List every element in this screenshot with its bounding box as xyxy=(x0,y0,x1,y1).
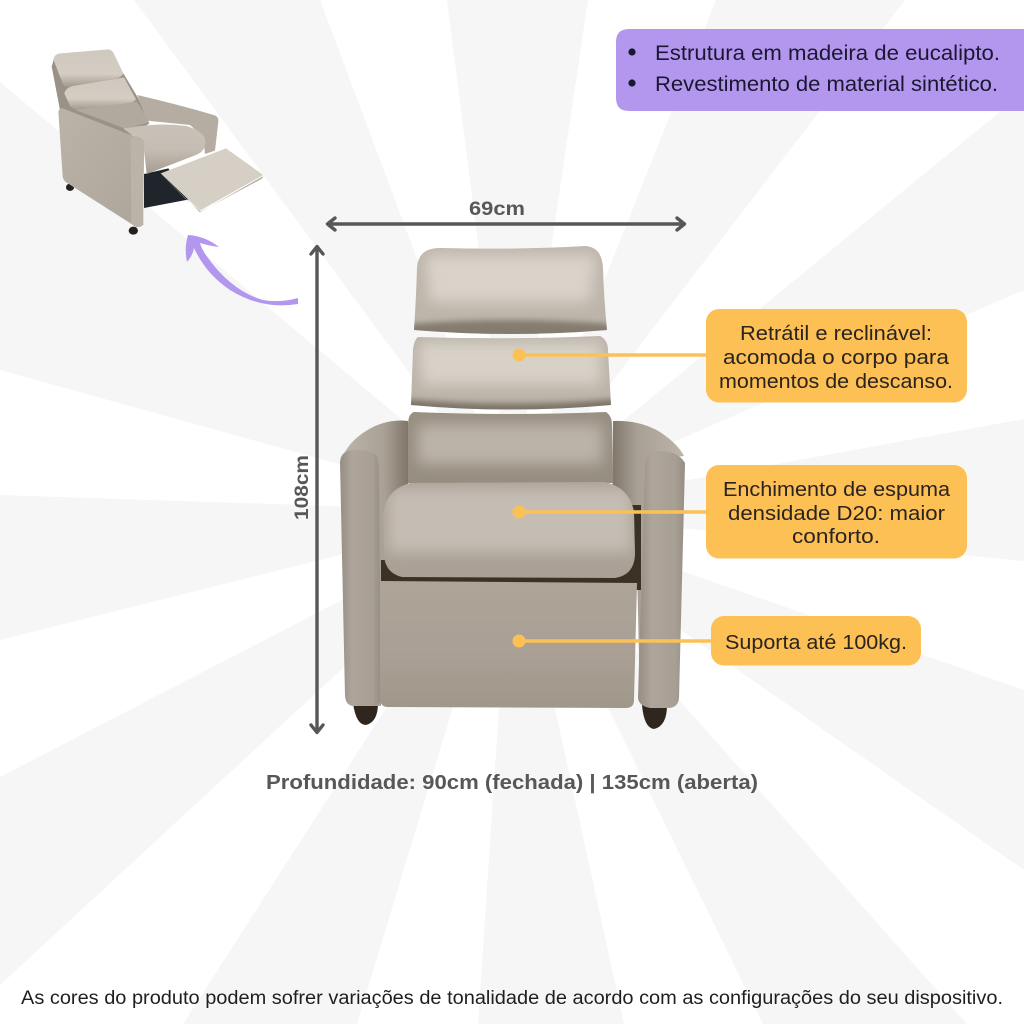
back frame xyxy=(52,58,149,137)
footrest xyxy=(161,148,263,212)
height label: 108cm xyxy=(292,455,313,520)
callout leader: foam xyxy=(512,506,710,518)
callout: foam: Enchimento de espuma xyxy=(723,479,951,501)
bullet list: Revestimento de material sintético. xyxy=(655,73,998,96)
purple info panel xyxy=(616,29,1024,111)
mechanism under seat xyxy=(144,168,189,208)
callout: foam xyxy=(706,465,967,558)
front base panel xyxy=(380,581,637,708)
height dimension arrow xyxy=(311,246,323,732)
footer disclaimer: As cores do produto podem sofrer variações de tonalidade de acordo com as configurações do seu dispositivo. xyxy=(21,988,1003,1009)
callout: recline: Retrátil e reclinável: xyxy=(740,323,932,345)
callout: weight xyxy=(711,616,921,666)
front leg xyxy=(129,227,138,235)
far arm xyxy=(137,95,218,154)
seat cushion xyxy=(123,124,205,174)
main chair xyxy=(340,240,685,729)
head cushion xyxy=(53,49,123,87)
head cushion xyxy=(414,246,607,334)
callout leader: weight xyxy=(512,634,715,648)
lumbar cushion xyxy=(75,102,148,129)
width dimension arrow xyxy=(328,218,684,230)
callout: recline: acomoda o corpo para xyxy=(723,347,950,369)
callout: foam: conforto. xyxy=(792,526,880,548)
width label: 69cm xyxy=(469,199,525,220)
seat cushion xyxy=(380,480,638,580)
near arm front xyxy=(131,136,144,227)
bullet list xyxy=(628,42,1000,96)
near arm side panel xyxy=(58,108,143,227)
left arm front xyxy=(340,450,381,706)
bullet list: Estrutura em madeira de eucalipto. xyxy=(655,42,1000,65)
callout: weight: Suporta até 100kg. xyxy=(725,632,907,654)
callout: foam: densidade D20: maior xyxy=(728,503,945,525)
rear feet xyxy=(353,703,378,725)
callout: recline: momentos de descanso. xyxy=(719,371,953,393)
dark gap around seat xyxy=(381,505,641,590)
callout leader: recline xyxy=(512,348,710,362)
curved purple arrow xyxy=(186,235,298,305)
right arm inner xyxy=(612,421,684,706)
small reclined chair xyxy=(52,49,263,235)
depth note: Profundidade: 90cm (fechada) | 135cm (aberta) xyxy=(266,772,758,794)
callout: recline xyxy=(706,309,967,402)
right arm front xyxy=(638,451,685,708)
legs xyxy=(66,184,74,191)
lumbar cushion xyxy=(408,412,613,483)
middle cushion xyxy=(411,336,611,410)
middle cushion xyxy=(64,77,136,110)
left arm inner xyxy=(342,421,408,706)
